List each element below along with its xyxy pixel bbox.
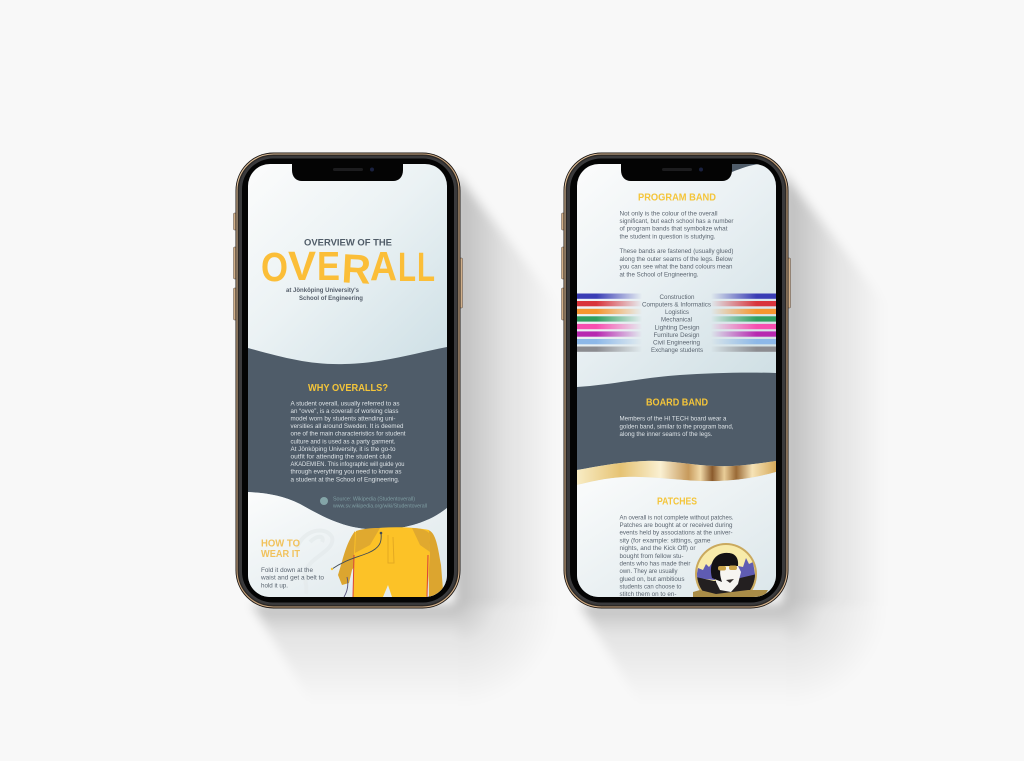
dark wave panel: why overalls [248,347,447,529]
text block: how to wear it: hold it up. [261,582,288,590]
heading: how to wear it [261,538,300,560]
lower light panel [577,472,776,597]
title: overall: V [288,243,317,289]
lower light panel [248,492,447,597]
device frame right [562,152,790,608]
phone shadows [252,172,886,706]
band labels: Furniture Design [654,332,700,339]
text block: program band: Not only is the colour of the overall [620,210,718,217]
heading: how to wear it: HOW TO [261,538,300,550]
text block: patches: bought from fellow stu- [620,553,684,560]
text block: patches: glued on, but ambitious [620,576,684,583]
title: overall: L [417,244,435,290]
subtitle: School of Engineering [299,295,363,302]
text block: patches: An overall is not complete without patches. [620,514,734,521]
callout line: belt [332,533,381,569]
decorative ghost swirl [299,529,324,540]
heading: why overalls: WHY OVERALLS? [308,382,388,394]
text block: how to wear it [260,567,325,590]
subtitle [286,287,363,302]
notch left [292,160,403,181]
text block: program band [620,210,734,278]
speaker and camera right [662,168,703,172]
screen content left [248,164,447,597]
band labels [642,294,711,354]
heading: how to wear it: WEAR IT [261,549,300,560]
text block: patches: students can choose to [620,584,682,591]
title: overall: E [317,243,340,289]
text block: program band: of program bands that symbolize what [620,226,728,233]
screen content right [577,164,776,605]
title: overall: L [398,244,416,290]
text block: patches: Patches are bought at or received during [620,522,733,529]
text block: board band: along the inner seams of the legs. [620,431,713,438]
device frame left [234,152,462,608]
text block: why overalls: At Jönköping University, it is the go-to [290,446,396,453]
band labels: Lighting Design [654,324,700,331]
text block: patches: stitch them on to en- [620,591,676,598]
band labels: Civil Engineering [653,340,700,347]
band labels: Exchange students [651,347,703,354]
phone left: overview screen [234,152,462,608]
heading: patches: PATCHES [657,496,697,508]
text block: why overalls: outfit for attending the student club [290,454,392,460]
source note: www.sv.wikipedia.org/wiki/Studentoverall [332,504,427,510]
notch right [621,160,732,181]
title: overall: A [370,243,397,289]
text block: why overalls: culture and is used as a party garment. [290,438,396,445]
band labels: Computers & Informatics [642,302,711,309]
text block: board band: Members of the HI TECH board wear a [620,416,727,423]
text block: how to wear it: waist and get a belt to [260,575,325,582]
text block: board band [620,416,734,438]
text block: program band: along the outer seams of the legs. Below [620,256,733,263]
text block: patches: events held by associations at the univer- [620,530,732,537]
text block: patches: sity (for example: sittings, game [620,537,711,544]
band labels: Logistics [665,309,689,316]
dark wave panel: board band [577,373,776,470]
text block: why overalls: AKADEMIEN. This infographic will guide you [290,461,405,468]
text block: why overalls: model worn by students attending uni- [290,416,396,422]
text block: why overalls: through everything you need to know as [290,469,402,476]
band labels: Construction [660,294,695,301]
heading: program band: PROGRAM BAND [638,192,716,204]
text block: why overalls: a student at the School of Engineering. [290,476,400,483]
text block: why overalls: A student overall, usually referred to as [290,400,400,407]
text block: patches: nights, and the Kick Off) or [620,545,696,552]
phone right: bands and patches screen [562,152,790,608]
text block: board band: golden band, similar to the program band, [620,423,734,430]
text block: program band: significant, but each school has a number [620,218,734,225]
title: overall [261,243,435,293]
text block: why overalls [290,400,406,483]
dark sliver at top [732,164,758,172]
text block: patches [620,514,734,598]
band labels: Mechanical [661,317,692,324]
text block: how to wear it: Fold it down at the [261,567,313,574]
title: overall: O [261,244,288,290]
text block: why overalls: an “ovve”, is a coverall of working class [290,408,398,415]
text block: patches: dents who has made their [620,560,690,568]
text block: program band: the student in question is studying. [620,233,716,240]
subtitle: at Jönköping University's [286,287,359,294]
callout line: cuff [344,577,348,597]
illustration: overall tied at the waist [331,527,443,597]
text block: program band: These bands are fastened (usually glued) [620,248,734,255]
text block: program band: you can see what the band colours mean [620,264,733,271]
text block: program band: at the School of Engineering. [620,271,699,278]
text block: why overalls: versities all around Sweden. It is deemed [290,423,404,430]
text block: why overalls: one of the main characteristics for student [290,431,406,438]
source note: Source: Wikipedia (Studentoverall) [333,496,415,502]
program band stripes [577,294,776,352]
icon: patch badge [693,543,768,597]
title: overall: R [341,245,372,293]
heading: board band: BOARD BAND [646,396,708,408]
title: overview of the: OVERVIEW OF THE [304,238,392,248]
source note [320,496,427,510]
gold band [577,461,776,485]
text block: patches: own. They are usually [620,568,678,575]
speaker and camera left [333,168,374,172]
